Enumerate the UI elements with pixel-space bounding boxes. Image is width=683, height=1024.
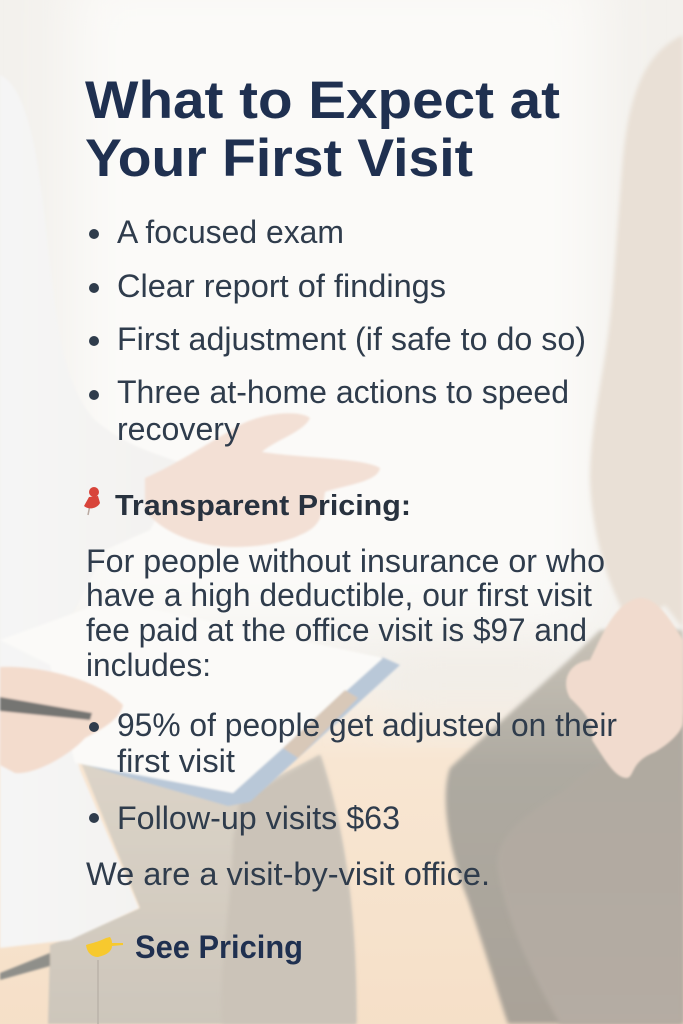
photo: doctor white coat: [0, 75, 185, 948]
bullet list: visit contents: recovery: [117, 411, 240, 447]
bullet list: visit contents: Clear report of findings: [117, 268, 446, 304]
bullet list: pricing details: Follow-up visits $63: [117, 800, 400, 836]
bullet list: visit contents: A focused exam: [117, 214, 344, 250]
title: What to Expect at: [85, 71, 560, 130]
paragraph: pricing intro: have a high deductible, our first visit: [86, 577, 592, 613]
icon: pointing hand: [86, 937, 123, 957]
title: Your First Visit: [85, 129, 473, 188]
paragraph: pricing intro: includes:: [86, 647, 211, 683]
heading: transparent pricing: Transparent Pricing:: [115, 490, 411, 522]
photo: doctor hand with pen: [0, 667, 123, 773]
photo: patient trousers, far leg: [497, 715, 683, 1024]
link: see pricing: See Pricing: [135, 929, 303, 965]
paragraph: pricing intro: [86, 543, 605, 683]
bullet list: pricing details: 95% of people get adjusted on their: [117, 707, 617, 743]
photo: doctor gesturing hand: [145, 413, 380, 547]
bullet list: pricing details: first visit: [117, 743, 235, 779]
icon: red pushpin: [84, 487, 100, 515]
statement: visit-by-visit office: We are a visit-by-visit office.: [86, 856, 490, 892]
paragraph: pricing intro: For people without insurance or who: [86, 543, 605, 579]
bullet list: visit contents: First adjustment (if safe to do so): [117, 321, 586, 357]
photo: patient trousers, near leg: [446, 630, 683, 1024]
photo: cardigan of seated patient: [590, 35, 683, 628]
photo: patient hands: [566, 598, 683, 778]
photo: clipboard: [0, 600, 400, 806]
bullet list: pricing details: [89, 707, 617, 836]
bullet list: visit contents: Three at-home actions to speed: [117, 374, 569, 410]
photo: doctor trousers: [48, 755, 356, 1024]
bullet list: visit contents: [89, 214, 586, 447]
paragraph: pricing intro: fee paid at the office visit is $97 and: [86, 612, 587, 648]
title: [85, 71, 560, 188]
